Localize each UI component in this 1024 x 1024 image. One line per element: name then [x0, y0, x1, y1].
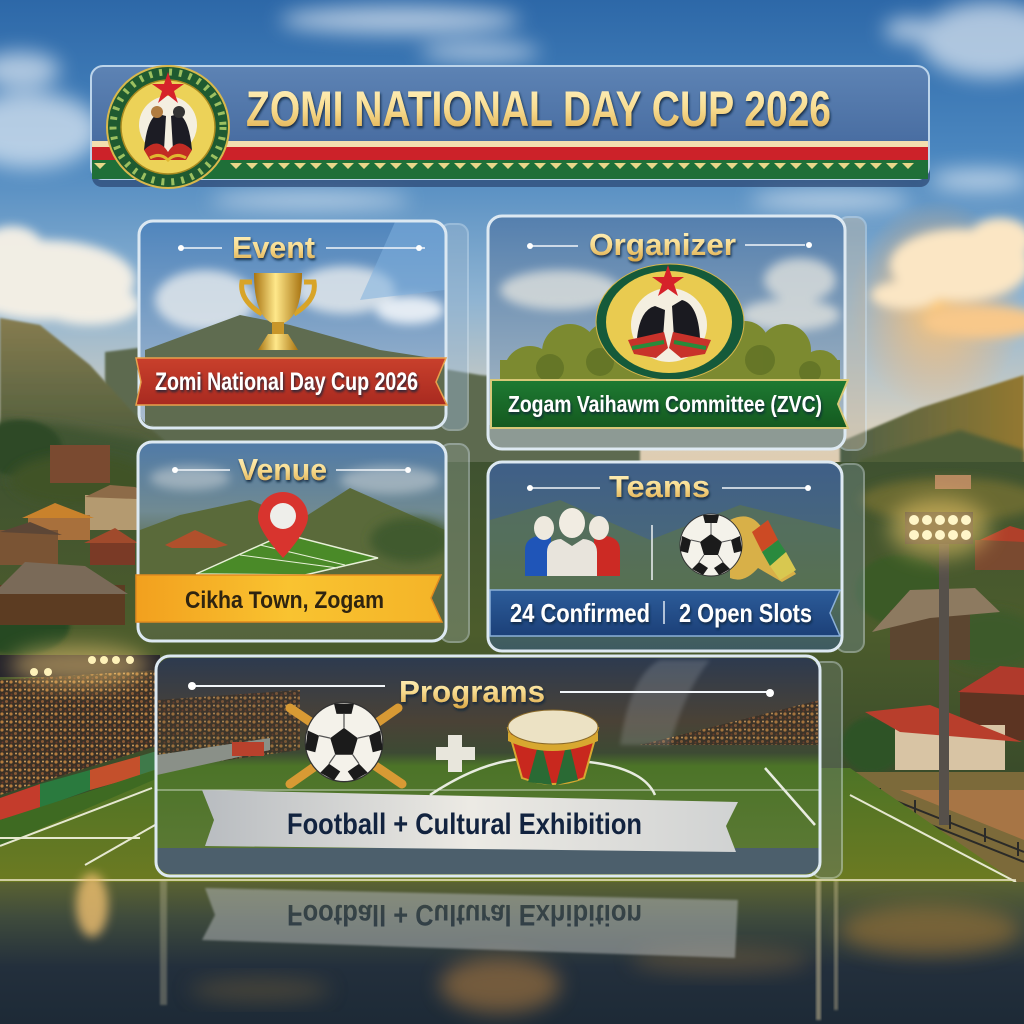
heading: organizer — [527, 227, 812, 262]
heading: programs — [188, 674, 774, 709]
ribbon: red and green stripes — [92, 141, 928, 179]
banner: venue name: Cikha Town, Zogam — [185, 587, 384, 614]
background: wet reflective foreground — [0, 873, 1024, 1024]
banner: event name: Zomi National Day Cup 2026 — [155, 368, 418, 396]
icon: header emblem — [107, 66, 229, 188]
reflection: programs banner — [202, 888, 738, 958]
background: clouds — [0, 2, 1024, 410]
icon: drum — [508, 710, 598, 785]
icon: football with crossed sticks — [290, 702, 402, 784]
heading: venue: Venue — [238, 452, 327, 487]
panel: event — [136, 220, 468, 430]
heading: event — [178, 230, 425, 265]
heading: teams — [527, 469, 811, 504]
reflection: programs banner: Football + Cultural Exhibition — [287, 898, 642, 931]
background: right town houses — [865, 475, 1024, 770]
banner: team counts — [490, 590, 840, 636]
heading: venue — [172, 452, 411, 487]
background: mountains — [0, 318, 1024, 802]
panel: programs — [155, 655, 842, 878]
title text: ZOMI NATIONAL DAY CUP 2026 — [246, 81, 831, 137]
banner: event name — [136, 358, 447, 405]
banner: venue name — [136, 575, 442, 622]
heading: teams: Teams — [609, 469, 710, 504]
icon: map pin on pitch — [196, 492, 378, 575]
background: dusty ground and fence, right — [848, 772, 1024, 882]
heading: programs: Programs — [399, 674, 545, 709]
panel: venue — [136, 441, 469, 642]
background: left stadium stands — [0, 645, 160, 820]
heading: organizer: Organizer — [589, 227, 736, 262]
background: left town houses — [0, 445, 185, 625]
icon: plus — [436, 735, 475, 772]
banner: team counts: 2 Open Slots — [679, 598, 812, 628]
banner: programs description — [202, 790, 738, 852]
background: sky — [0, 0, 1024, 500]
banner: team counts: 24 Confirmed — [510, 598, 650, 628]
icon: trophy — [242, 273, 314, 350]
heading: event: Event — [232, 230, 315, 265]
icon: team people — [525, 508, 620, 576]
banner: organizer name: Zogam Vaihawm Committee (ZVC) — [508, 391, 822, 417]
icon: organizer emblem — [596, 264, 744, 380]
banner: programs description: Football + Cultural Exhibition — [287, 808, 642, 841]
banner: organizer name — [491, 380, 848, 428]
icon: football and scarf — [680, 514, 796, 582]
panel: teams — [487, 461, 864, 652]
background: right stadium floodlight — [889, 498, 989, 825]
panel: header title bar — [91, 66, 930, 188]
panel: organizer — [487, 215, 866, 450]
background: pitch — [0, 768, 1016, 882]
